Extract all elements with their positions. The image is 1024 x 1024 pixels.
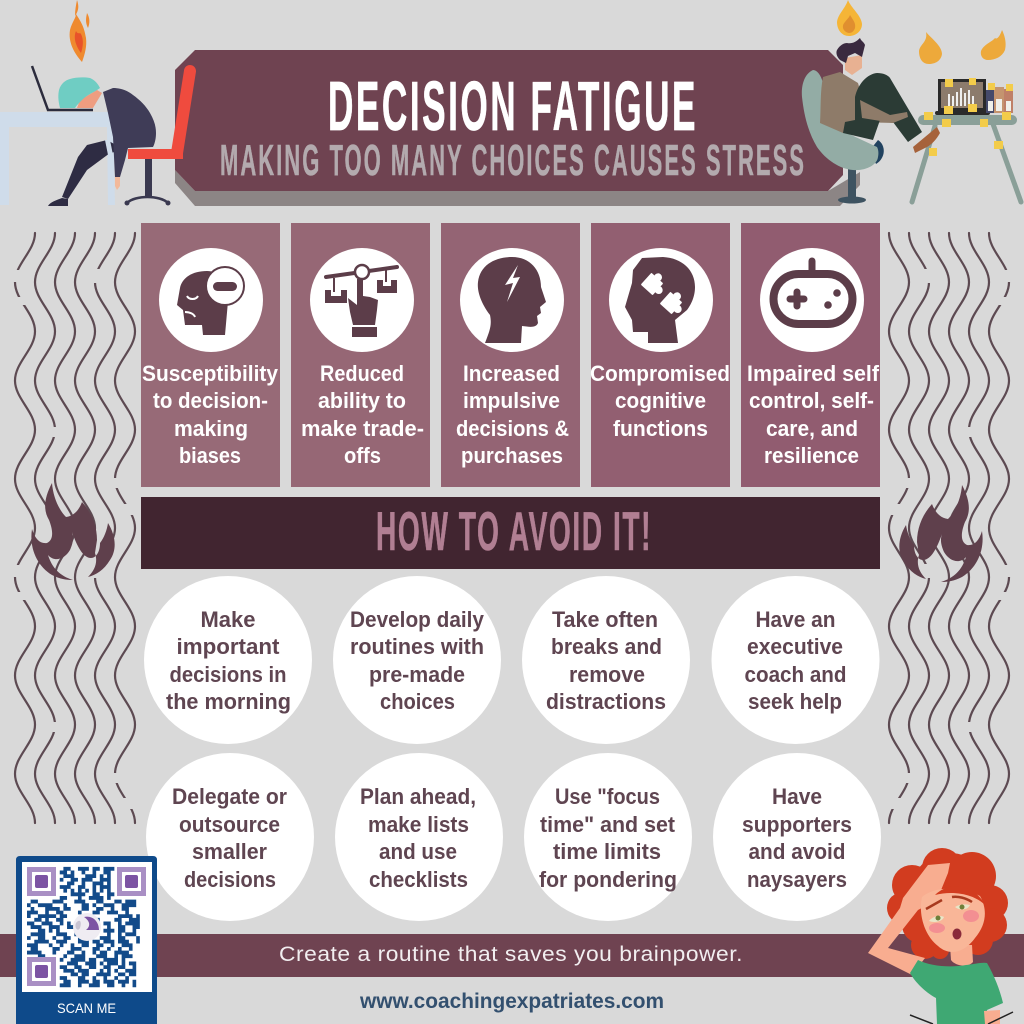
section heading bar: HOW TO AVOID IT!	[376, 500, 652, 562]
tip circle: breaks: distractions	[546, 689, 666, 714]
icon: head with lightning bolt	[460, 248, 564, 352]
tip circle: breaks: remove	[569, 662, 645, 687]
illustration: exhausted man at desk	[0, 0, 190, 206]
icon: scale and pointing hand	[310, 248, 414, 352]
tip circle: supporters: and avoid	[748, 839, 846, 864]
chair	[177, 71, 190, 153]
tip circle: focus time	[524, 753, 692, 921]
icon: left flame	[31, 483, 115, 580]
tip circle: plan ahead	[335, 753, 503, 921]
QR centre logo	[73, 913, 101, 941]
tip circle: plan ahead: checklists	[369, 867, 468, 892]
panel: susceptibility to biases: making	[174, 416, 248, 441]
flames	[837, 0, 1006, 64]
cheeks	[929, 923, 945, 933]
footer band	[0, 934, 1024, 977]
eyes and brows	[926, 897, 972, 909]
hair	[887, 848, 1008, 959]
tip circle: focus time: time limits	[553, 839, 661, 864]
tip circle: delegate: decisions	[184, 867, 276, 892]
tip circle: breaks	[522, 576, 690, 744]
tip circle: focus time: for pondering	[539, 867, 677, 892]
footer band: Create a routine that saves you brainpower.	[279, 943, 743, 966]
tip circle: supporters: Have	[772, 784, 822, 809]
panel: compromised cognitive functions: cognitive	[615, 388, 706, 413]
QR modules	[27, 869, 140, 985]
desk	[0, 112, 115, 205]
icon: head with minus badge	[159, 248, 263, 352]
torso	[820, 72, 908, 133]
tip circle: executive coach: Have an	[756, 607, 836, 632]
laptop	[32, 66, 93, 110]
sticky notes	[924, 78, 1013, 156]
icon: game controller	[760, 248, 864, 352]
card text: Reduced	[320, 361, 404, 386]
mouth	[952, 928, 962, 940]
shirt strip	[105, 140, 113, 155]
card text: Increased	[463, 361, 560, 386]
tip circle: executive coach: seek help	[748, 689, 842, 714]
QR code card	[16, 856, 157, 1024]
laptop and chart	[938, 79, 986, 111]
panel: compromised cognitive functions: functions	[613, 416, 708, 441]
panel: impaired self control: care, and	[766, 416, 858, 441]
scan me label: SCAN ME	[57, 1000, 116, 1016]
tip circle: executive coach: coach and	[744, 662, 846, 687]
tip circle: daily routines: pre-made	[369, 662, 465, 687]
shoe	[913, 127, 940, 153]
tip circle: daily routines	[333, 576, 501, 744]
panel: impaired self control	[741, 223, 880, 487]
tip circle: morning decisions: Make	[200, 607, 256, 632]
arm over shin	[860, 100, 908, 123]
tip circle: supporters: supporters	[742, 812, 852, 837]
tip circle: plan ahead: Plan ahead,	[360, 784, 476, 809]
tip circle: morning decisions	[144, 576, 312, 744]
tip circle: delegate: outsource	[179, 812, 280, 837]
right wavy lines pattern	[887, 233, 1015, 823]
tip circle: delegate	[146, 753, 314, 921]
tip circle: daily routines: Develop daily	[350, 607, 485, 632]
tip circle: focus time: time" and set	[540, 812, 676, 837]
panel: reduced trade-offs: ability to	[318, 388, 406, 413]
tip circle: executive coach	[712, 576, 880, 744]
trousers	[843, 73, 922, 142]
lower arm	[984, 1010, 1000, 1024]
card text: Compromised	[590, 361, 730, 386]
section heading bar	[141, 497, 880, 569]
table	[912, 124, 1021, 202]
flame above head	[70, 0, 89, 62]
tip circle: breaks: Take often	[552, 607, 658, 632]
QR finder top right	[120, 870, 144, 894]
cushion	[870, 140, 884, 164]
tip circle: plan ahead: make lists	[368, 812, 469, 837]
panel: increased impulsive decisions: impulsive	[463, 388, 560, 413]
tip circle: executive coach: executive	[747, 634, 843, 659]
neck	[950, 945, 973, 966]
shirt	[910, 960, 1003, 1024]
panel: compromised cognitive functions	[590, 223, 730, 487]
raised arm and hand	[868, 863, 950, 975]
panel: reduced trade-offs	[291, 223, 430, 487]
website url: www.coachingexpatriates.com	[359, 990, 664, 1013]
panel: impaired self control: resilience	[764, 443, 859, 468]
tip circle: breaks: breaks and	[551, 634, 662, 659]
left wavy lines pattern	[9, 233, 137, 823]
illustration: tired woman with hand on forehead	[868, 848, 1013, 1024]
title banner	[175, 50, 860, 206]
legs	[62, 140, 125, 199]
tip circle: morning decisions: important	[176, 634, 280, 659]
tip circle: delegate: smaller	[192, 839, 267, 864]
binders	[986, 90, 994, 113]
panel: impaired self control: control, self-	[749, 388, 874, 413]
hair fringe	[935, 886, 985, 905]
card text: Impaired self	[747, 361, 880, 386]
hair and face	[77, 90, 102, 108]
panel: susceptibility to biases: biases	[179, 443, 241, 468]
icon: head with puzzle pieces	[609, 248, 713, 352]
panel: reduced trade-offs: make trade-	[301, 416, 424, 441]
QR finder top left	[30, 870, 54, 894]
hand	[115, 177, 120, 190]
panel: increased impulsive decisions	[441, 223, 580, 487]
panel: reduced trade-offs: offs	[344, 443, 381, 468]
head and hair	[845, 55, 862, 75]
panel: increased impulsive decisions: purchases	[461, 443, 563, 468]
panel: susceptibility to biases: to decision-	[153, 388, 268, 413]
jacket body	[103, 88, 156, 177]
card text: Susceptibility	[142, 361, 279, 386]
illustration: man curled in chair with desk	[802, 0, 1021, 204]
tip circle: supporters: naysayers	[747, 867, 847, 892]
face	[921, 889, 985, 952]
tip circle: delegate: Delegate or	[172, 784, 287, 809]
tip circle: plan ahead: and use	[379, 839, 457, 864]
tip circle: morning decisions: decisions in	[170, 662, 286, 687]
tip circle: daily routines: routines with	[350, 634, 484, 659]
tip circle: focus time: Use "focus	[555, 784, 660, 809]
tip circle: supporters	[713, 753, 881, 921]
tip circle: daily routines: choices	[380, 689, 455, 714]
icon: right flame	[899, 485, 983, 582]
tip circle: morning decisions: the morning	[166, 689, 291, 714]
panel: susceptibility to biases	[141, 223, 280, 487]
QR finder bottom left	[30, 960, 54, 984]
panel: increased impulsive decisions: decisions &	[456, 416, 569, 441]
chair stem and base	[848, 168, 856, 198]
egg chair	[802, 70, 878, 170]
dark strokes	[910, 1012, 1013, 1024]
